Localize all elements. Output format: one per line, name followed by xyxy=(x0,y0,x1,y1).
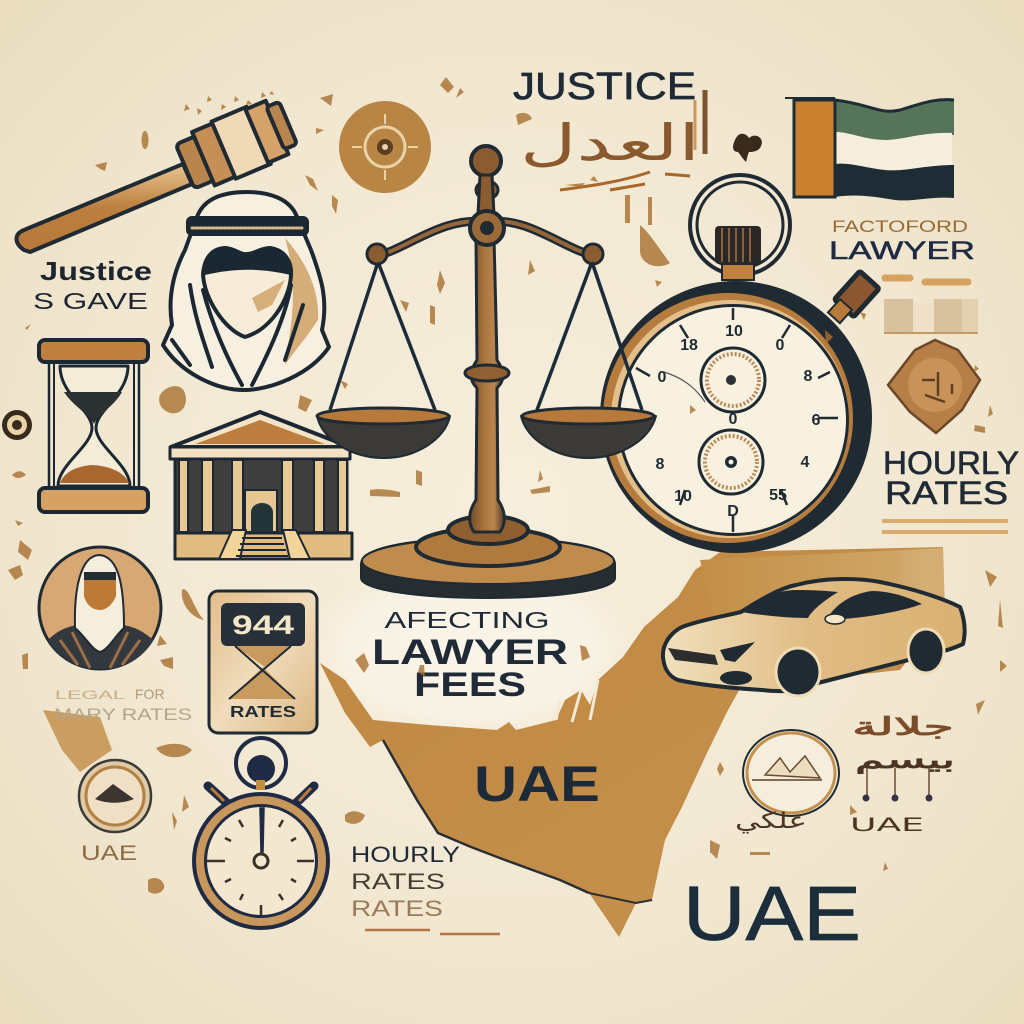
faded label: hourly rates: FOR xyxy=(135,686,165,702)
dial numerals xyxy=(656,323,821,520)
label: UAE small: UAE xyxy=(81,842,137,865)
left pan xyxy=(317,408,450,458)
title: justice: JUSTICE xyxy=(513,66,696,108)
gavel handle xyxy=(16,164,192,252)
icon: ornament near flag xyxy=(733,134,762,162)
doorway xyxy=(245,490,277,532)
label: justice gavel: Justice xyxy=(40,256,152,286)
arabic heading xyxy=(520,90,705,190)
faded label: hourly rates: MARY RATES xyxy=(54,705,192,724)
dial numerals: 55 xyxy=(769,487,787,504)
columns xyxy=(179,460,347,532)
scale beam xyxy=(372,221,600,256)
label: UAE on map: UAE xyxy=(474,756,600,812)
UAE flag xyxy=(785,98,954,200)
steps xyxy=(175,533,352,559)
label: hourly rates rates: HOURLY xyxy=(351,842,460,867)
right pan xyxy=(521,408,656,458)
dial numerals: 10 xyxy=(674,488,692,505)
icon: small eye ring xyxy=(2,410,32,440)
label: affecting lawyer fees: AFECTING xyxy=(384,607,550,633)
scattered ornaments xyxy=(8,77,1007,894)
label: justice gavel: S GAVE xyxy=(33,288,148,314)
label: hourly rates xyxy=(882,445,1019,532)
pediment xyxy=(171,412,350,447)
label: hourly rates rates xyxy=(351,842,500,934)
dial numerals: 0 xyxy=(658,369,667,386)
icon: seal xyxy=(888,340,980,433)
card number: 944 xyxy=(232,610,294,640)
arabic script block: بيسم xyxy=(855,746,955,774)
small watch ticks xyxy=(207,820,314,915)
ring loop xyxy=(690,175,790,275)
label: hourly rates: HOURLY xyxy=(883,445,1019,481)
dial numerals: 18 xyxy=(680,337,698,354)
gavel head xyxy=(173,94,300,195)
side pusher xyxy=(825,271,879,327)
scale right string overlay xyxy=(592,262,642,410)
car xyxy=(663,579,965,696)
label: affecting lawyer fees: FEES xyxy=(414,666,526,704)
dial numerals: 0 xyxy=(729,411,738,428)
arabic script block: علكي xyxy=(735,809,807,834)
circular emblem xyxy=(743,730,839,816)
scale base xyxy=(361,538,615,598)
map of UAE xyxy=(43,547,945,937)
label: hourly rates: RATES xyxy=(885,475,1008,511)
label: factors lawyer: FACTOFORD xyxy=(832,217,968,236)
dial numerals: 4 xyxy=(801,454,810,471)
garment folds xyxy=(172,285,303,385)
gavel xyxy=(16,94,300,252)
dial numerals: 8 xyxy=(656,456,665,473)
small UAE coin xyxy=(79,760,151,832)
label: affecting lawyer fees: LAWYER xyxy=(372,633,568,672)
dial numerals: D xyxy=(727,503,739,520)
label: hourly rates rates: RATES xyxy=(351,896,443,921)
car wheels xyxy=(776,648,820,696)
portrait medallion xyxy=(39,547,161,669)
dial numerals: 0 xyxy=(776,337,785,354)
headdress outline xyxy=(163,192,329,390)
headdress shading xyxy=(285,238,318,365)
label: justice gavel xyxy=(33,256,152,314)
arabian figure with headdress xyxy=(163,192,329,390)
scale post xyxy=(470,238,504,532)
scale strings xyxy=(330,262,642,410)
justice scale xyxy=(330,146,642,598)
dial numerals: 10 xyxy=(725,323,743,340)
faded label: hourly rates: LEGAL xyxy=(55,688,126,702)
courthouse building xyxy=(170,412,352,559)
label: factors lawyer: LAWYER xyxy=(829,237,975,265)
label: factors lawyer xyxy=(829,217,975,282)
dial ticks xyxy=(636,308,838,532)
large stopwatch xyxy=(600,175,879,553)
watch case xyxy=(600,281,872,553)
rates hourglass card xyxy=(209,591,317,733)
lower sub-dial xyxy=(699,430,763,494)
label: hourly rates rates: RATES xyxy=(351,869,445,894)
arabic script block: جلالة xyxy=(852,712,954,741)
upper sub-dial xyxy=(701,348,765,412)
arabic heading: العدل xyxy=(520,114,700,172)
label: affecting lawyer fees xyxy=(372,607,568,704)
face xyxy=(203,248,291,337)
crown xyxy=(715,226,761,264)
dial numerals: 8 xyxy=(804,368,813,385)
medallion xyxy=(339,101,431,193)
small stopwatch xyxy=(194,738,328,928)
icon: books xyxy=(884,299,978,333)
scale pans xyxy=(317,408,656,458)
headband xyxy=(186,216,309,236)
dial numerals: 6 xyxy=(812,412,821,429)
faded label: hourly rates xyxy=(54,686,192,724)
hourglass xyxy=(39,340,148,512)
arabic script block xyxy=(735,712,955,836)
card label: RATES xyxy=(230,704,296,721)
label: UAE large: UAE xyxy=(683,871,861,957)
light patch behind fees text xyxy=(295,555,645,745)
arabic script block: UAE xyxy=(850,814,924,836)
